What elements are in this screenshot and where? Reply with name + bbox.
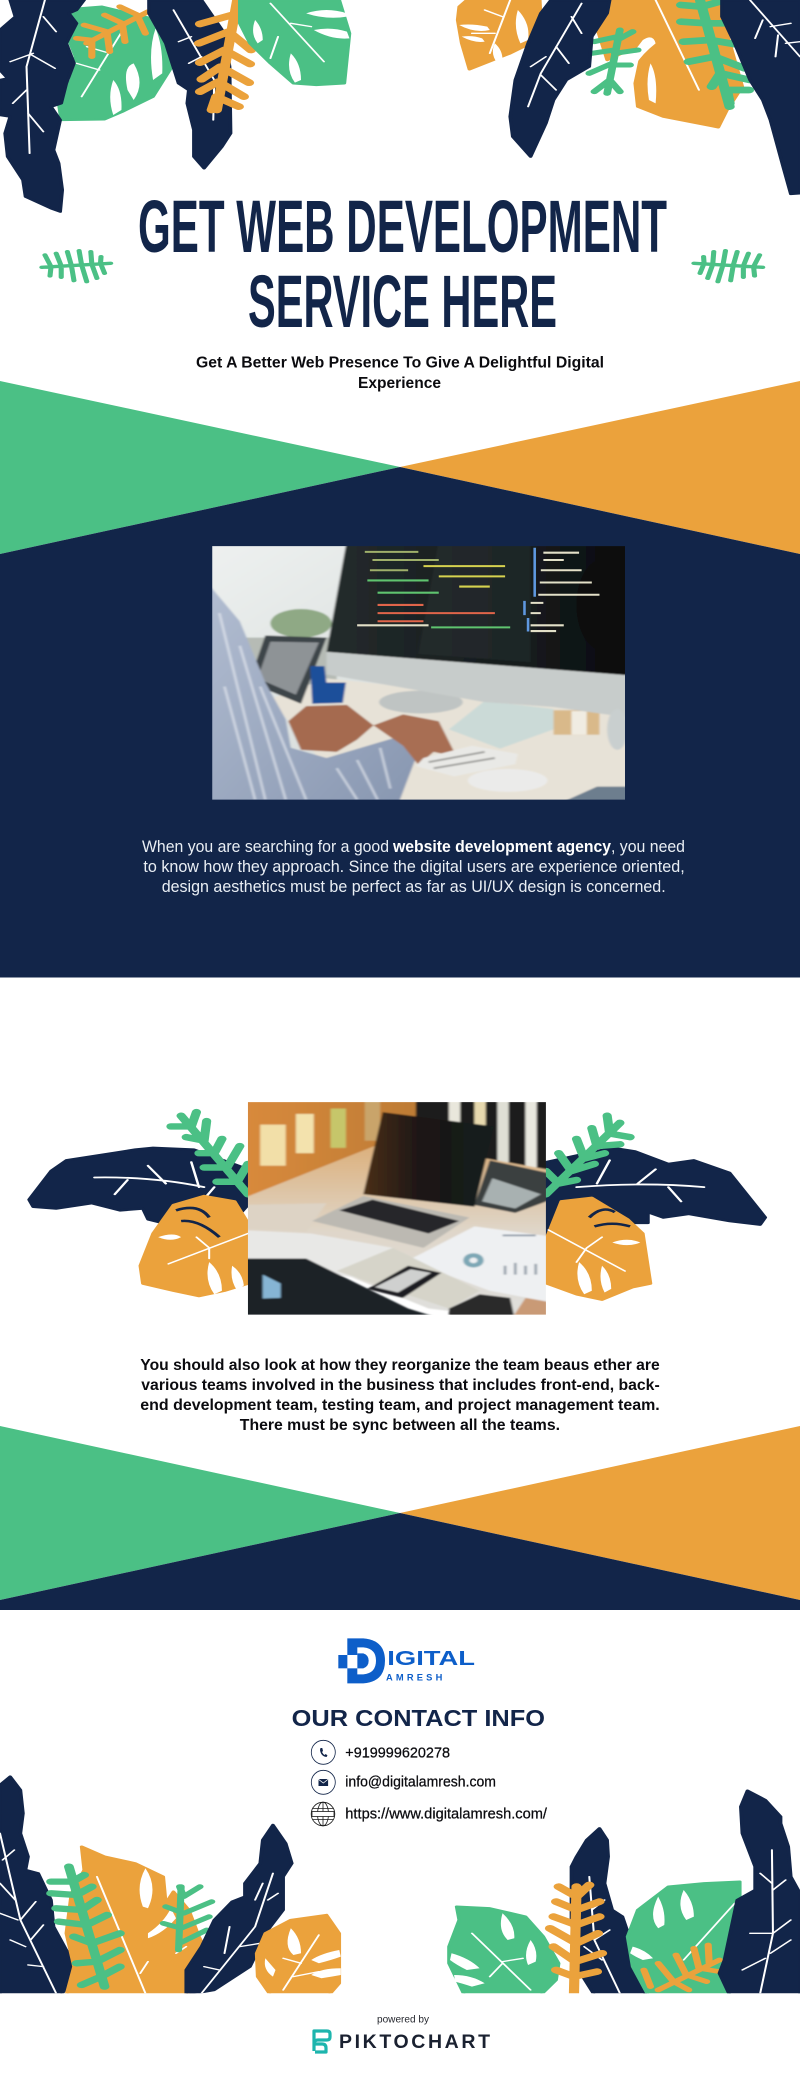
icon: globe — [311, 1802, 335, 1826]
panel: second geometric band — [0, 1426, 800, 1610]
right orange monstera — [547, 1198, 651, 1300]
icon: small fern right — [694, 251, 763, 282]
left green fern — [171, 1112, 248, 1194]
navy leaf right center — [571, 1828, 645, 1995]
left orange monstera — [140, 1196, 248, 1296]
logo: Digital Amresh — [338, 1638, 475, 1683]
title: SERVICE HERE — [248, 260, 557, 343]
large green fern right — [681, 0, 750, 107]
orange triangle — [400, 381, 800, 554]
bottom tropical leaves — [0, 1777, 800, 1995]
text: phone number: +919999620278 — [345, 1745, 450, 1761]
subtitle: Experience — [358, 375, 441, 392]
green triangle — [0, 1426, 400, 1600]
middle tropical leaves — [29, 1112, 765, 1300]
text: teams paragraph: end development team, testing team, and project management team. — [140, 1397, 660, 1414]
left navy leaf — [0, 0, 84, 212]
green monstera far right — [628, 1882, 740, 1995]
text: agency paragraph: , you need — [611, 838, 685, 856]
text: teams paragraph: You should also look at how they reorganize the team beaus ether are — [140, 1357, 660, 1374]
icon: small fern left — [42, 251, 111, 282]
right navy banana leaf — [546, 1148, 765, 1237]
subtitle — [196, 354, 604, 392]
panel: first geometric band — [0, 381, 800, 978]
navy base — [0, 1513, 800, 1610]
top tropical leaves — [0, 0, 800, 212]
right big orange leaf — [594, 0, 742, 127]
text: piktochart wordmark: PIKTOCHART — [339, 2031, 490, 2053]
far right navy leaf — [719, 1791, 800, 1995]
right navy leaf center — [510, 0, 610, 157]
footer: piktochart logo — [314, 2031, 490, 2053]
center navy leaf — [149, 0, 231, 168]
small orange fern left — [77, 7, 148, 57]
large green fern — [51, 1867, 120, 1987]
text: teams paragraph: various teams involved in the business that includes front-end, back- — [141, 1377, 660, 1394]
small green fern right — [589, 30, 638, 93]
navy leaf left center — [186, 1825, 292, 1995]
right green fern — [546, 1116, 630, 1194]
orange monstera bottom left — [257, 1915, 341, 1995]
text: agency paragraph: When you are searching for a good — [142, 838, 389, 856]
left monstera leaf green — [59, 7, 171, 120]
title — [138, 185, 667, 343]
orange fern center right — [550, 1885, 602, 1993]
contact list — [311, 1740, 548, 1826]
text: agency paragraph: to know how they approach. Since the digital users are experience oriented, — [143, 858, 685, 876]
right orange monstera — [458, 0, 541, 69]
footer: powered by: powered by — [377, 2014, 430, 2026]
icon: email — [311, 1770, 335, 1794]
logo: Digital Amresh: IGITAL — [387, 1647, 475, 1670]
left navy banana leaf — [29, 1148, 248, 1237]
text: agency paragraph: design aesthetics must be perfect as far as UI/UX design is concerned. — [162, 878, 666, 896]
orange fern center — [199, 0, 255, 110]
logo: Digital Amresh: AMRESH — [386, 1673, 443, 1683]
text: email address: info@digitalamresh.com — [345, 1775, 496, 1791]
small green fern — [163, 1887, 212, 1950]
icon: piktochart mark — [314, 2031, 330, 2052]
green monstera bottom right — [449, 1907, 559, 1995]
icon: phone — [311, 1740, 335, 1764]
right green monstera top — [240, 0, 349, 85]
text: teams paragraph — [140, 1357, 660, 1434]
left navy leaf — [0, 1777, 76, 1995]
text: agency paragraph: website development agency — [392, 838, 612, 856]
photo: developer at desktop monitor — [202, 540, 635, 805]
large orange leaf — [66, 1847, 204, 1995]
photo: laptop on desk — [248, 1102, 546, 1315]
orange triangle — [400, 1426, 800, 1600]
text: agency paragraph — [142, 838, 685, 896]
far right navy leaf — [722, 0, 800, 194]
text: teams paragraph: There must be sync between all the teams. — [240, 1417, 560, 1434]
text: website: https://www.digitalamresh.com/ — [345, 1806, 548, 1822]
navy panel — [0, 467, 800, 978]
small orange fern right — [644, 1945, 719, 1990]
heading: our contact info: OUR CONTACT INFO — [292, 1705, 545, 1731]
subtitle: Get A Better Web Presence To Give A Delightful Digital — [196, 354, 604, 372]
green triangle — [0, 381, 400, 554]
